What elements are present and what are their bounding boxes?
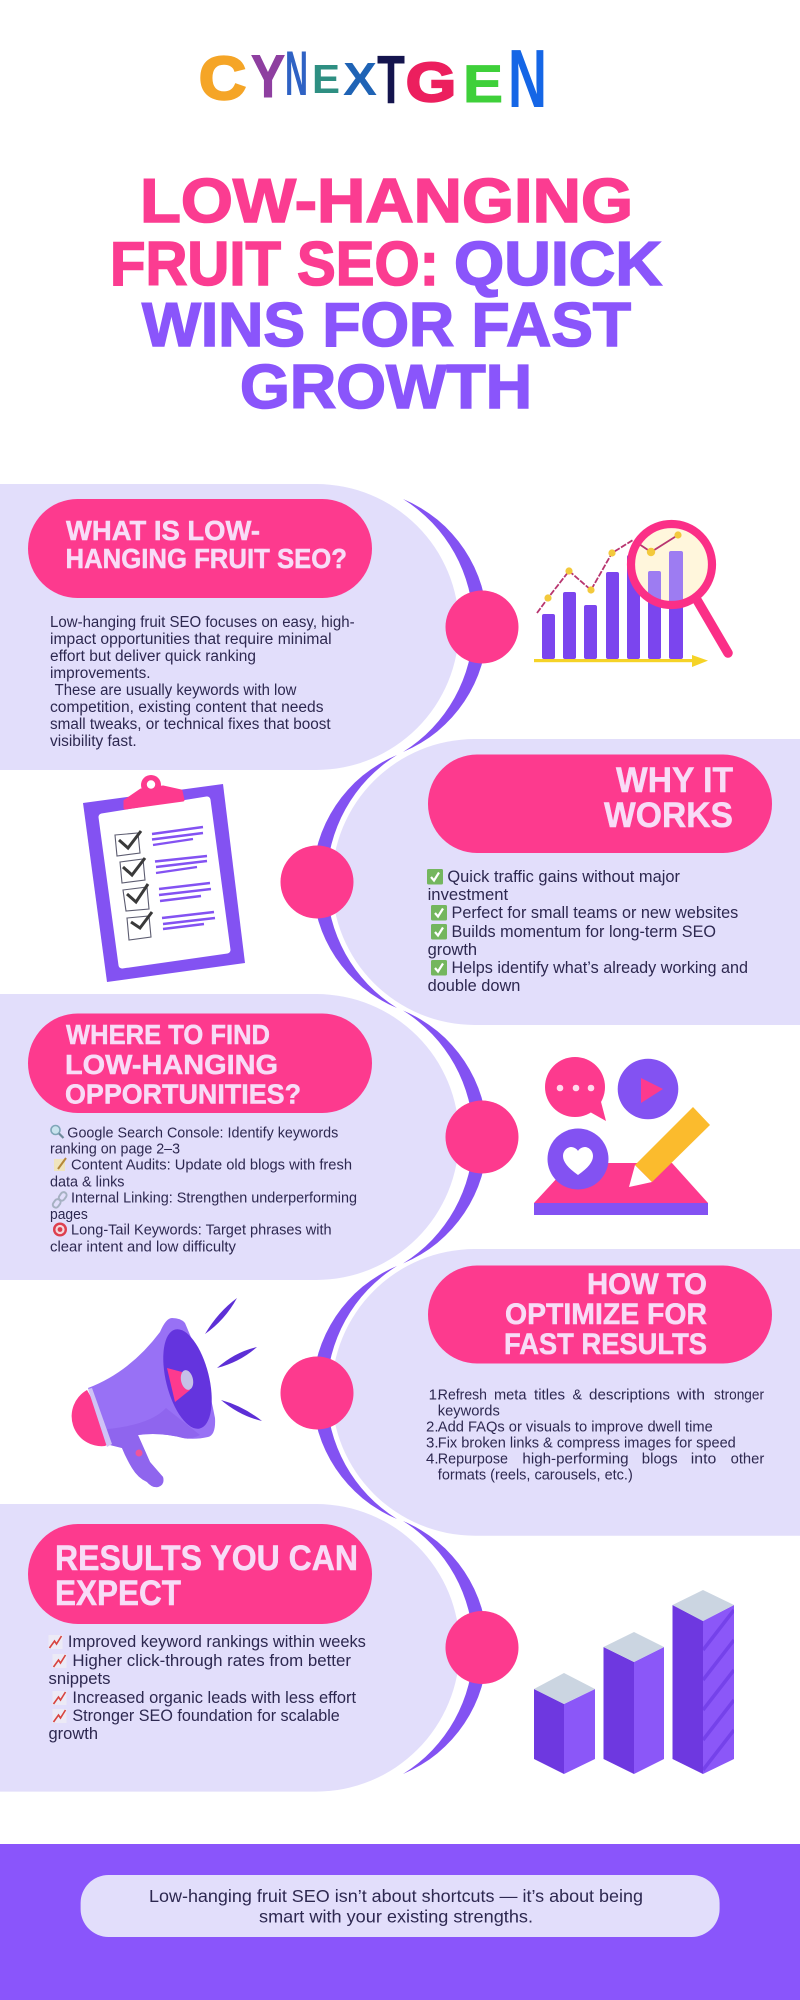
numbered list: Repurpose bbox=[438, 1450, 508, 1467]
heading pill 1 bbox=[28, 499, 372, 598]
icon: social bubbles and pencil bbox=[534, 1057, 710, 1215]
checklist text: Helps identify what’s already working and bbox=[452, 959, 748, 977]
numbered list: & bbox=[572, 1387, 582, 1404]
results text: snippets bbox=[48, 1670, 110, 1688]
closing callout bbox=[81, 1875, 720, 1937]
numbered list bbox=[426, 1387, 764, 1484]
logo: E bbox=[463, 55, 503, 114]
connector arc 5 bbox=[403, 1521, 487, 1774]
numbered list: with bbox=[676, 1387, 705, 1404]
checklist text: Quick traffic gains without major bbox=[447, 868, 680, 886]
title: LOW-HANGING bbox=[140, 167, 633, 236]
checklist text bbox=[428, 868, 748, 995]
list text 3: Long-Tail Keywords: Target phrases with bbox=[71, 1222, 332, 1239]
logo: G bbox=[406, 51, 456, 113]
panel: where to find opportunities bbox=[0, 994, 518, 1280]
numbered list: blogs bbox=[642, 1450, 678, 1467]
body text 1: competition, existing content that needs bbox=[50, 699, 324, 716]
connector arc 4 bbox=[313, 1266, 397, 1519]
body text 1: These are usually keywords with low bbox=[55, 682, 297, 699]
icon: target emoji bbox=[53, 1222, 67, 1236]
list text 3 bbox=[50, 1125, 357, 1256]
panel: why it works bbox=[280, 739, 800, 1025]
numbered list: titles bbox=[534, 1387, 565, 1404]
heading pill 3: WHERE TO FIND bbox=[66, 1019, 270, 1050]
numbered list: formats (reels, carousels, etc.) bbox=[438, 1466, 633, 1484]
icon: isometric 3D bars bbox=[534, 1590, 734, 1774]
heading pill 5: EXPECT bbox=[55, 1574, 181, 1613]
logo: N bbox=[285, 39, 308, 109]
icon: magnifier emoji bbox=[51, 1126, 64, 1138]
body text 1: small tweaks, or technical fixes that boost bbox=[50, 716, 331, 733]
logo: N bbox=[508, 32, 547, 125]
title: QUICK bbox=[454, 230, 662, 299]
numbered list: Refresh bbox=[438, 1387, 487, 1404]
body text 1: visibility fast. bbox=[50, 733, 137, 750]
node 5 bbox=[446, 1611, 518, 1684]
connector arc 3 bbox=[403, 1010, 487, 1264]
node 3 bbox=[446, 1100, 518, 1174]
node 1 bbox=[446, 590, 518, 664]
title: WINS FOR FAST bbox=[142, 291, 631, 360]
results text: Increased organic leads with less effort bbox=[72, 1689, 357, 1707]
numbered list: keywords bbox=[438, 1402, 500, 1420]
list text 3: Google Search Console: Identify keywords bbox=[67, 1125, 338, 1142]
heading pill 3: LOW-HANGING bbox=[65, 1049, 278, 1080]
icon: bar chart with magnifier bbox=[534, 524, 728, 667]
chart emoji icons bbox=[48, 1635, 66, 1723]
logo: E bbox=[312, 56, 340, 102]
logo: C bbox=[199, 45, 246, 112]
results text: growth bbox=[48, 1725, 98, 1743]
body text 1: effort but deliver quick ranking bbox=[50, 648, 256, 665]
panel: what is low-hanging fruit SEO bbox=[0, 484, 518, 770]
logo: Y bbox=[251, 43, 285, 110]
numbered list: stronger bbox=[714, 1387, 764, 1404]
heading pill 2: WHY IT bbox=[616, 761, 733, 800]
results text: Improved keyword rankings within weeks bbox=[68, 1633, 366, 1651]
node 4 bbox=[280, 1356, 354, 1430]
panel: how to optimize bbox=[280, 1249, 800, 1536]
body text 1: improvements. bbox=[50, 665, 150, 682]
list text 3: Internal Linking: Strengthen underperforming bbox=[71, 1190, 357, 1207]
list text 3: ranking on page 2–3 bbox=[50, 1140, 180, 1157]
logo: X bbox=[343, 53, 377, 105]
title bbox=[110, 167, 662, 422]
numbered list: 4. bbox=[426, 1450, 439, 1467]
logo bbox=[199, 32, 547, 125]
checklist text: Perfect for small teams or new websites bbox=[452, 904, 738, 922]
body text 1: impact opportunities that require minimal bbox=[50, 631, 332, 648]
numbered list: into bbox=[691, 1450, 716, 1467]
icon: clipboard checklist bbox=[83, 775, 245, 982]
connector arc 2 bbox=[313, 755, 397, 1008]
checklist text: investment bbox=[428, 886, 509, 904]
check icons bbox=[427, 869, 447, 976]
heading pill 4: OPTIMIZE FOR bbox=[505, 1298, 707, 1331]
numbered list: Fix broken links & compress images for speed bbox=[438, 1434, 736, 1452]
checklist text: Builds momentum for long-term SEO bbox=[452, 923, 716, 941]
closing callout: smart with your existing strengths. bbox=[259, 1906, 533, 1926]
closing callout: Low-hanging fruit SEO isn’t about shortcuts — it’s about being bbox=[149, 1886, 643, 1906]
heading pill 5: RESULTS YOU CAN bbox=[55, 1539, 358, 1578]
heading pill 4: HOW TO bbox=[587, 1268, 707, 1301]
heading pill 5 bbox=[28, 1524, 372, 1624]
icon: memo emoji bbox=[54, 1158, 66, 1171]
heading pill 3 bbox=[28, 1014, 372, 1113]
checklist text: growth bbox=[428, 941, 477, 959]
results text bbox=[48, 1633, 366, 1743]
numbered list: descriptions bbox=[589, 1387, 670, 1404]
list text 3: Content Audits: Update old blogs with fresh bbox=[71, 1157, 352, 1174]
heading pill 4: FAST RESULTS bbox=[504, 1328, 707, 1361]
numbered list: meta bbox=[494, 1387, 527, 1404]
list text 3: pages bbox=[50, 1206, 88, 1223]
results text: Stronger SEO foundation for scalable bbox=[72, 1707, 340, 1725]
heading pill 1: HANGING FRUIT SEO? bbox=[66, 543, 347, 574]
numbered list: 3. bbox=[426, 1434, 439, 1452]
heading pill 2 bbox=[428, 754, 772, 853]
node 2 bbox=[280, 846, 354, 918]
title: GROWTH bbox=[240, 353, 532, 422]
numbered list: other bbox=[731, 1450, 764, 1467]
panel: results you can expect bbox=[0, 1504, 518, 1792]
numbered list: high-performing bbox=[522, 1450, 629, 1467]
list text 3: data & links bbox=[50, 1174, 124, 1190]
footer band bbox=[0, 1844, 800, 2000]
numbered list: 1. bbox=[429, 1387, 441, 1404]
numbered list: 2. bbox=[426, 1418, 439, 1435]
icon: link emoji bbox=[52, 1191, 68, 1209]
body text 1 bbox=[50, 614, 355, 750]
logo: T bbox=[377, 41, 405, 118]
heading pill 1: WHAT IS LOW- bbox=[66, 515, 260, 546]
heading pill 3: OPPORTUNITIES? bbox=[65, 1078, 301, 1110]
icon: megaphone bbox=[72, 1298, 262, 1487]
list text 3: clear intent and low difficulty bbox=[50, 1238, 236, 1256]
heading pill 4 bbox=[428, 1266, 772, 1364]
title: FRUIT SEO: bbox=[110, 230, 439, 299]
connector arc 1 bbox=[403, 499, 487, 752]
body text 1: Low-hanging fruit SEO focuses on easy, high- bbox=[50, 614, 355, 631]
checklist text: double down bbox=[428, 977, 520, 995]
numbered list: Add FAQs or visuals to improve dwell time bbox=[438, 1418, 713, 1435]
heading pill 2: WORKS bbox=[604, 796, 733, 835]
results text: Higher click-through rates from better bbox=[72, 1652, 352, 1670]
